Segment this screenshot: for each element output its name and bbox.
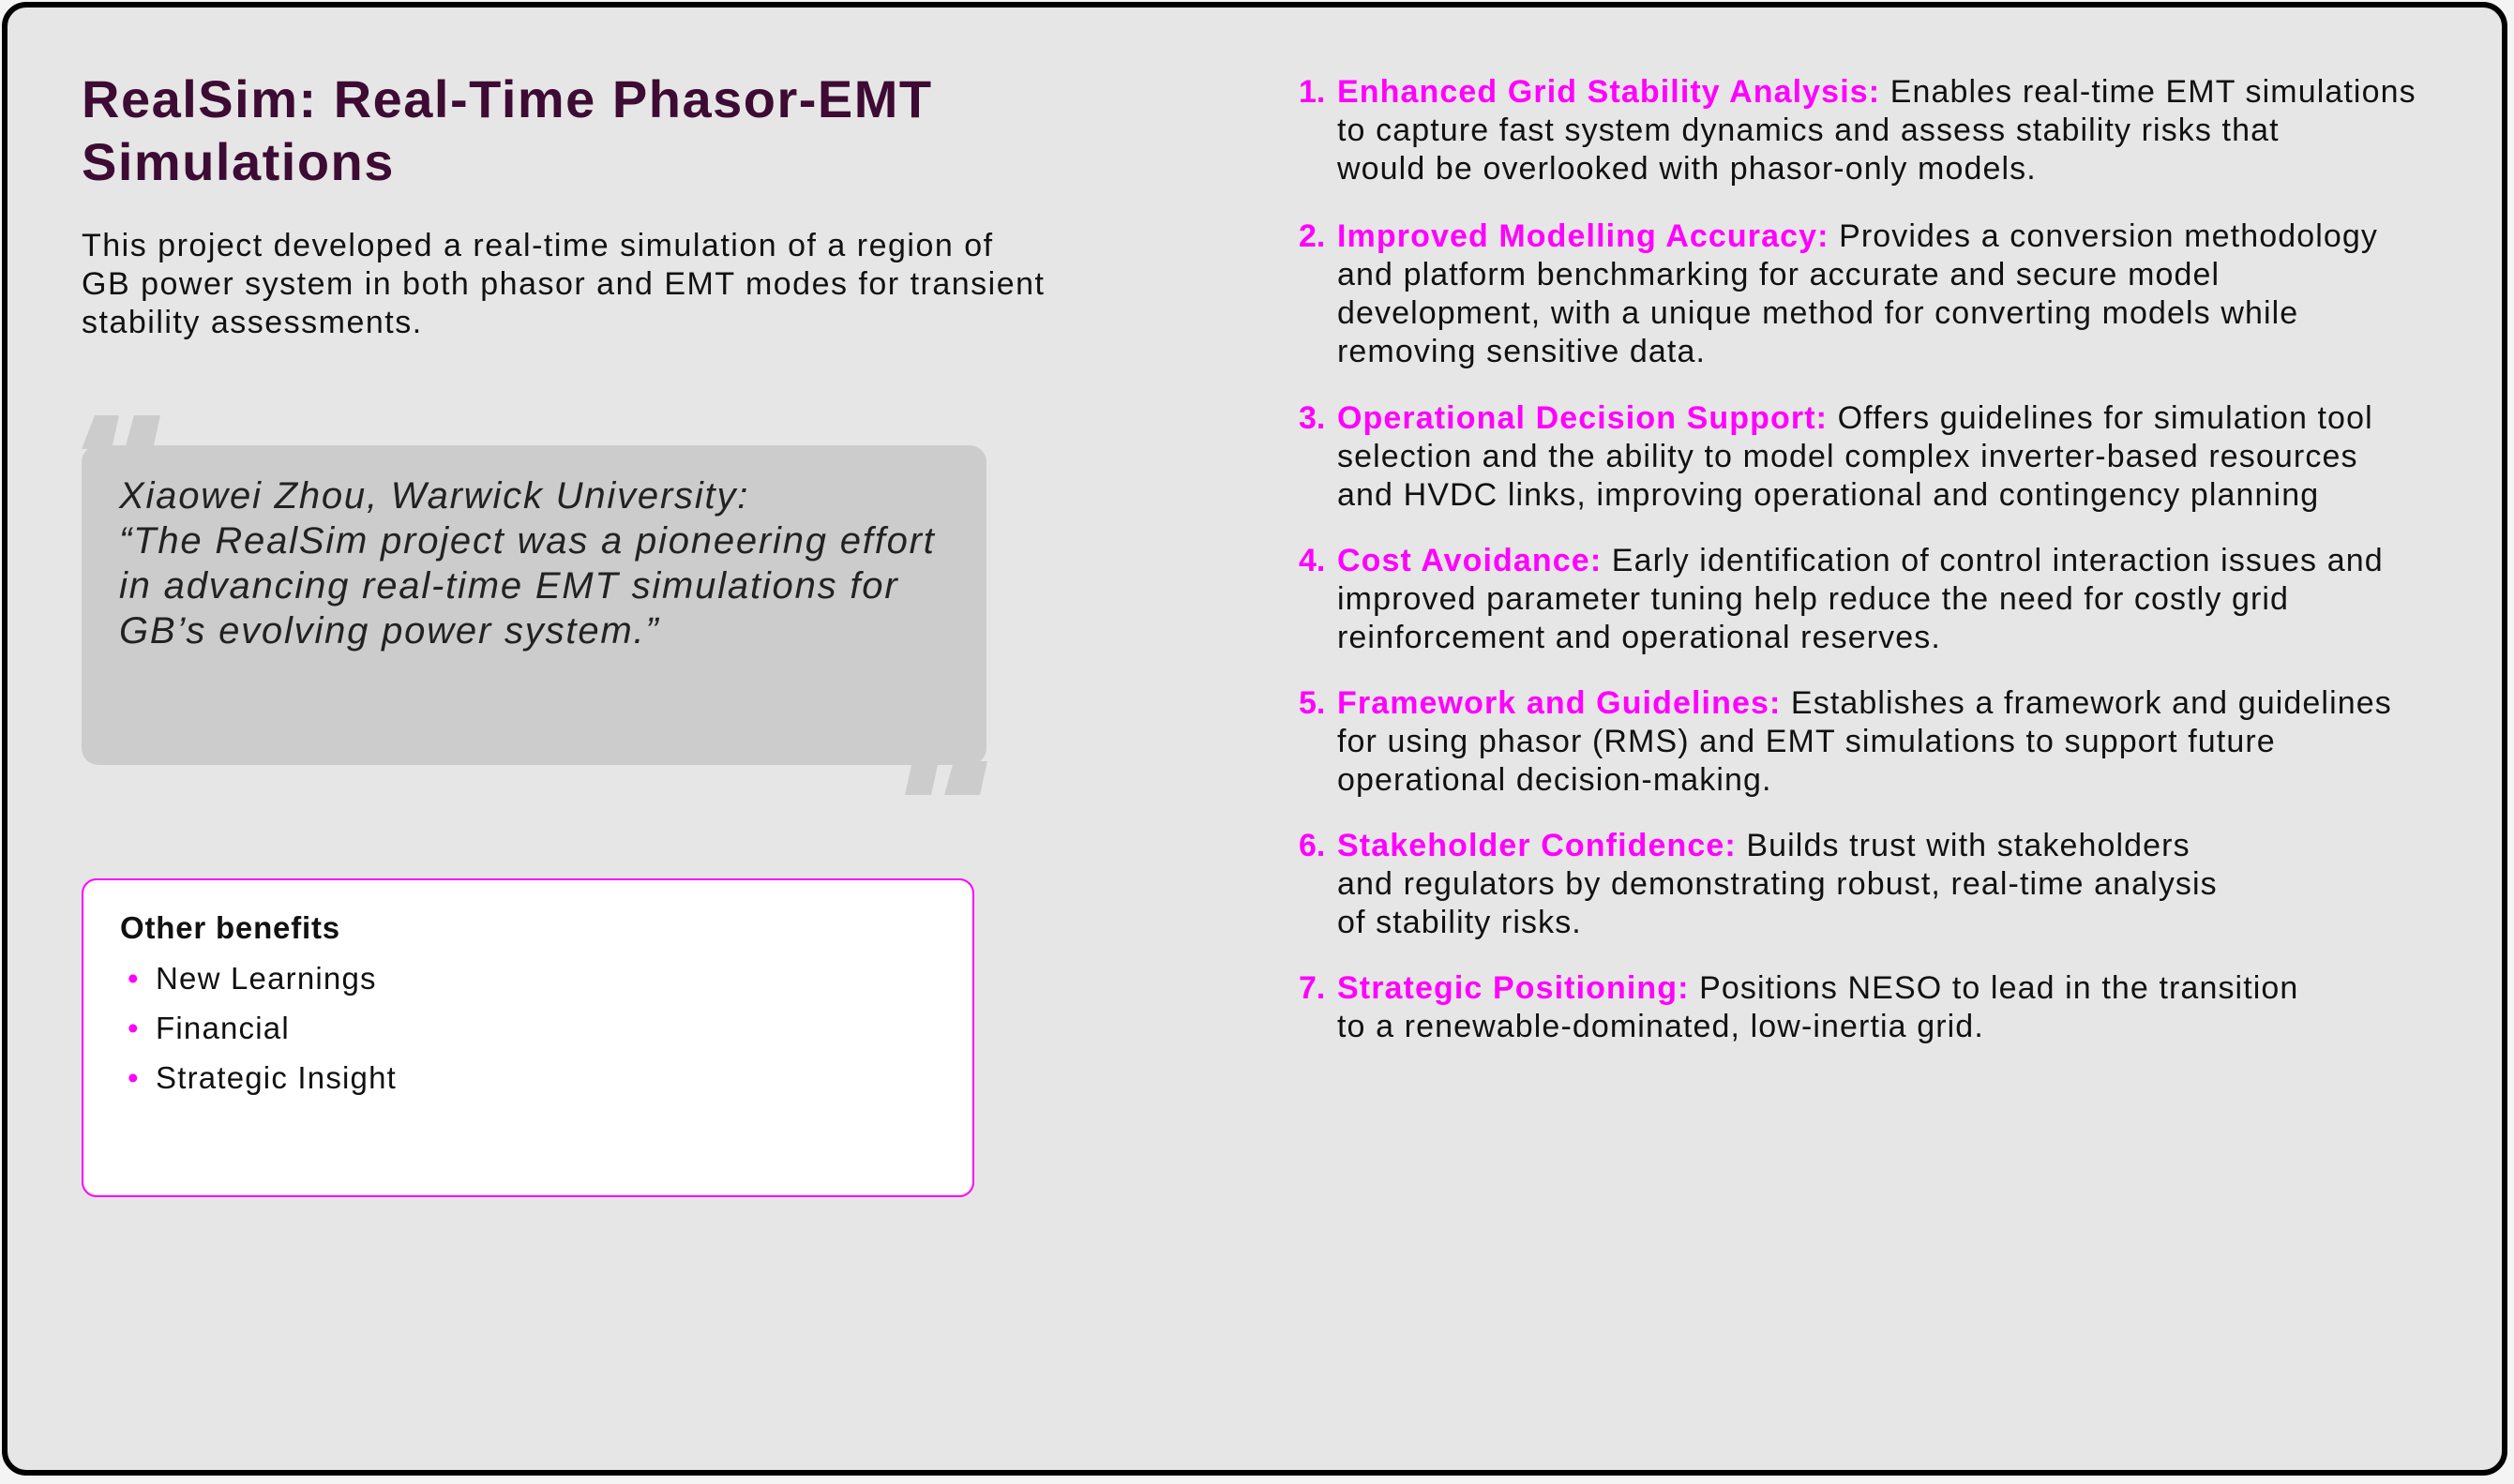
title: RealSim: Real-Time Phasor-EMT [82,69,933,128]
bullet list: Strategic Insight [156,1060,397,1095]
text block: quote [118,475,936,652]
item 4: Cost Avoidance: Early identification of control interaction issues and [1337,543,2384,578]
bullet list: • [128,1011,140,1045]
item 6: and regulators by demonstrating robust, real-time analysis [1337,866,2218,902]
item 1: would be overlooked with phasor-only models. [1337,151,2037,187]
item 6: 6. [1299,828,1325,863]
item 1: Enhanced Grid Stability Analysis: Enables real-time EMT simulations [1337,74,2416,110]
text block: description: stability assessments. [82,305,423,340]
item 4: improved parameter tuning help reduce the need for costly grid [1337,581,2289,617]
item 2: 2. [1299,218,1325,254]
item 5: Framework and Guidelines: Establishes a framework and guidelines [1337,685,2392,721]
icon: closing quote marks [905,761,987,795]
item 4 [1299,543,2384,655]
item 3: Operational Decision Support: Offers guidelines for simulation tool [1337,400,2373,436]
item 2: and platform benchmarking for accurate and secure model [1337,257,2220,292]
item 6: Stakeholder Confidence: Builds trust with stakeholders [1337,828,2190,863]
item 1 [1299,74,2416,187]
bullet list [128,961,397,1095]
icon: opening quote marks [82,415,160,449]
panel: quote box [82,445,986,765]
item 5 [1299,685,2392,798]
item 4: reinforcement and operational reserves. [1337,620,1941,655]
item 7: to a renewable-dominated, low-inertia grid. [1337,1009,1984,1044]
text block: description [82,228,1045,340]
title [82,69,933,191]
text block: quote: “The RealSim project was a pioneering effort [119,520,936,562]
bullet list: New Learnings [156,961,377,996]
item 2 [1299,218,2378,369]
item 1: to capture fast system dynamics and assess stability risks that [1337,112,2280,148]
heading: other benefits: Other benefits [120,910,340,945]
item 4: 4. [1299,543,1325,578]
item 7: 7. [1299,970,1325,1006]
item 3: selection and the ability to model complex inverter-based resources [1337,439,2358,474]
item 2: Improved Modelling Accuracy: Provides a conversion methodology [1337,218,2378,254]
item 7 [1299,970,2298,1044]
panel: other benefits [82,878,974,1197]
numbered benefits list [1299,74,2416,1044]
item 3: and HVDC links, improving operational and contingency planning [1337,477,2319,513]
item 2: development, with a unique method for converting models while [1337,295,2298,331]
item 1: 1. [1299,74,1325,110]
bullet list: • [128,961,140,996]
item 5: operational decision-making. [1337,762,1772,798]
item 6: of stability risks. [1337,905,1582,940]
item 5: for using phasor (RMS) and EMT simulations to support future [1337,724,2276,759]
item 6 [1299,828,2218,940]
text block: quote: in advancing real-time EMT simulations for [119,565,898,607]
item 3: 3. [1299,400,1325,436]
item 5: 5. [1299,685,1325,721]
item 2: removing sensitive data. [1337,334,1706,369]
text block: description: This project developed a real-time simulation of a region of [82,228,994,263]
item 3 [1299,400,2373,513]
text block: quote: Xiaowei Zhou, Warwick University: [119,475,749,517]
text block: quote: GB’s evolving power system.” [119,610,660,652]
bullet list: • [128,1060,140,1095]
title: Simulations [82,132,395,191]
text block: description: GB power system in both phasor and EMT modes for transient [82,266,1045,302]
item 7: Strategic Positioning: Positions NESO to lead in the transition [1337,970,2298,1006]
bullet list: Financial [156,1011,290,1045]
